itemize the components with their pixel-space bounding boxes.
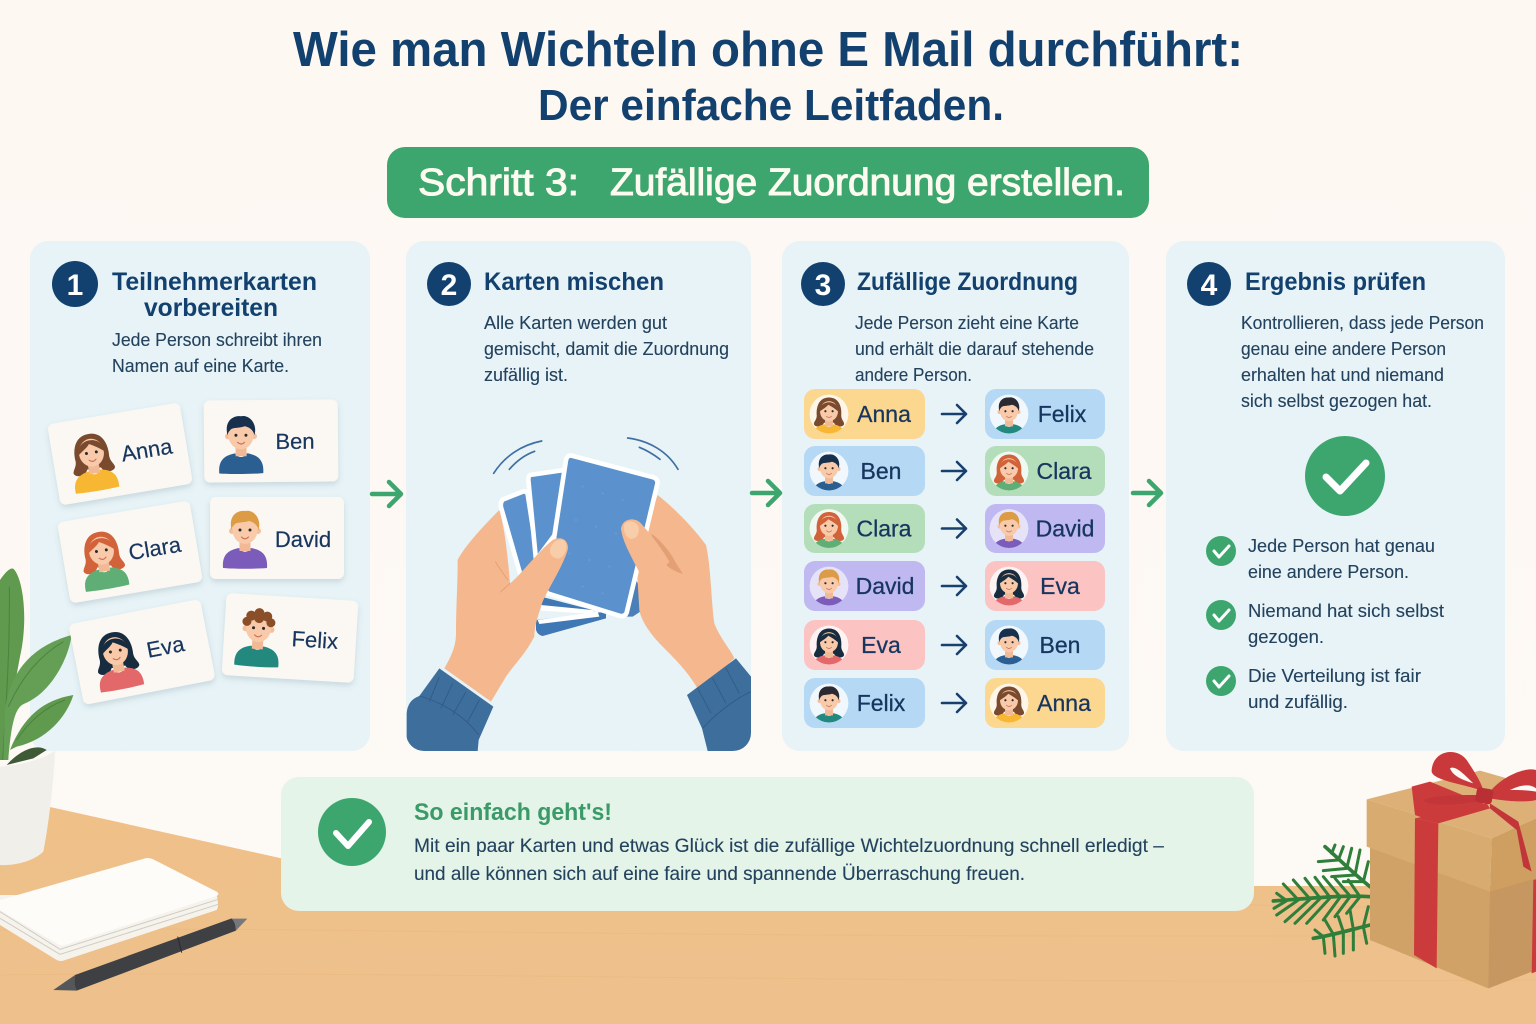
assignment: Eva to Ben: Ben — [1040, 632, 1080, 658]
assignment: Clara to David — [804, 504, 1105, 554]
panel 2: description — [484, 312, 729, 385]
panel 4 background — [1166, 241, 1505, 751]
illustration: hands shuffling cards — [407, 438, 751, 751]
arrow 2 to 3 — [752, 481, 780, 505]
panel 1: description: Jede Person schreibt ihren — [112, 329, 322, 350]
assignment: Felix to Anna: Anna — [1037, 690, 1091, 716]
card: Anna — [47, 403, 193, 505]
panel 2: description: Alle Karten werden gut — [484, 312, 667, 333]
pen — [53, 918, 247, 991]
panel 2: description: gemischt, damit die Zuordnung — [484, 338, 729, 359]
pine branch — [1273, 845, 1370, 956]
gift box — [1367, 752, 1536, 988]
card: Felix: Felix — [291, 626, 339, 654]
check item 3 — [1206, 665, 1421, 712]
arrow 1 to 2 — [372, 482, 401, 506]
panel 1: description: Namen auf eine Karte. — [112, 355, 289, 376]
assignment: David to Eva: Eva — [1040, 573, 1080, 599]
assignment: Clara to David: Clara — [857, 516, 912, 542]
card: Clara — [57, 501, 203, 603]
check item 1 — [1206, 535, 1435, 582]
check item 3: und zufällig. — [1248, 691, 1348, 712]
panel 4: description — [1241, 312, 1484, 411]
panel 4: description: genau eine andere Person — [1241, 338, 1446, 359]
card: Clara: Clara — [127, 532, 183, 565]
assignment: Felix to Anna: Felix — [857, 690, 906, 716]
assignment: Eva to Ben: Eva — [861, 632, 901, 658]
panel 3: step number: 3 — [815, 269, 831, 302]
bottom banner: Mit ein paar Karten und etwas Glück ist die zufällige Wichtelzuordnung schnell erledigt – — [414, 835, 1164, 857]
assignment: Clara to David: David — [1036, 516, 1094, 542]
assignment: Anna to Felix: Felix — [1038, 401, 1087, 427]
step banner — [387, 147, 1149, 218]
assignment: Anna to Felix — [804, 389, 1105, 439]
title: Wie man Wichteln ohne E Mail durchführt: — [293, 23, 1243, 77]
check item 2 — [1206, 600, 1444, 647]
arrow 3 to 4 — [1133, 481, 1161, 505]
title — [293, 23, 1243, 130]
plant in pot — [0, 568, 73, 865]
step banner: Schritt 3: — [418, 162, 579, 204]
assignment: Eva to Ben — [804, 620, 1105, 670]
panel 2: step number — [427, 262, 471, 306]
card: Felix — [222, 593, 358, 683]
check item 1: eine andere Person. — [1248, 561, 1409, 582]
panel 4: step number — [1187, 262, 1231, 306]
panel 1: step number: 1 — [67, 269, 83, 302]
panel 1: heading: vorbereiten — [144, 294, 278, 322]
panel 2: step number: 2 — [441, 269, 457, 302]
bottom banner: So einfach geht's! — [414, 799, 612, 826]
panel 1: step number — [52, 261, 98, 307]
bottom banner: und alle können sich auf eine faire und spannende Überraschung freuen. — [414, 863, 1025, 885]
card: Eva: Eva — [144, 631, 187, 663]
panel 4: step number: 4 — [1201, 269, 1218, 302]
panel 3: description: Jede Person zieht eine Karte — [855, 312, 1079, 333]
check item 1: Jede Person hat genau — [1248, 535, 1435, 556]
card: Ben — [204, 399, 338, 483]
assignment: Anna to Felix: Anna — [857, 401, 911, 427]
panel 2 background — [406, 241, 751, 751]
card: David — [210, 497, 344, 579]
panel 3: description: andere Person. — [855, 364, 972, 385]
assignment: Ben to Clara: Clara — [1037, 458, 1092, 484]
card: Eva — [68, 599, 216, 705]
bottom banner — [281, 777, 1254, 911]
panel 4: description: erhalten hat und niemand — [1241, 364, 1444, 385]
notepad — [0, 858, 218, 961]
check item 2: Niemand hat sich selbst — [1248, 600, 1444, 621]
assignment: Ben to Clara: Ben — [861, 458, 901, 484]
check item 3: Die Verteilung ist fair — [1248, 665, 1421, 686]
panel 3 background — [782, 241, 1129, 751]
card: David: David — [275, 527, 331, 552]
title: Der einfache Leitfaden. — [538, 81, 1004, 130]
assignment: David to Eva — [804, 561, 1105, 611]
panel 4: description: Kontrollieren, dass jede Person — [1241, 312, 1484, 333]
panel 3: description — [855, 312, 1094, 385]
panel 4: description: sich selbst gezogen hat. — [1241, 390, 1432, 411]
panel 1 background — [30, 241, 370, 751]
panel 4: heading: Ergebnis prüfen — [1245, 268, 1426, 296]
assignment: Felix to Anna — [804, 678, 1105, 728]
wooden desk — [0, 796, 1536, 1024]
panel 3: step number — [801, 262, 845, 306]
step banner: Zufällige Zuordnung erstellen. — [610, 162, 1125, 204]
icon: large check — [1305, 436, 1385, 516]
panel 1: description — [112, 329, 322, 376]
panel 3: description: und erhält die darauf stehende — [855, 338, 1094, 359]
check item 2: gezogen. — [1248, 626, 1324, 647]
assignment: Ben to Clara — [804, 446, 1105, 496]
panel 1: heading: Teilnehmerkarten — [112, 268, 317, 296]
panel 2: heading: Karten mischen — [484, 268, 664, 296]
card: Anna: Anna — [119, 433, 175, 467]
panel 3: heading: Zufällige Zuordnung — [857, 268, 1078, 296]
card: Ben: Ben — [275, 429, 315, 454]
panel 2: description: zufällig ist. — [484, 364, 568, 385]
panel 1: heading — [112, 268, 317, 322]
assignment: David to Eva: David — [856, 573, 914, 599]
